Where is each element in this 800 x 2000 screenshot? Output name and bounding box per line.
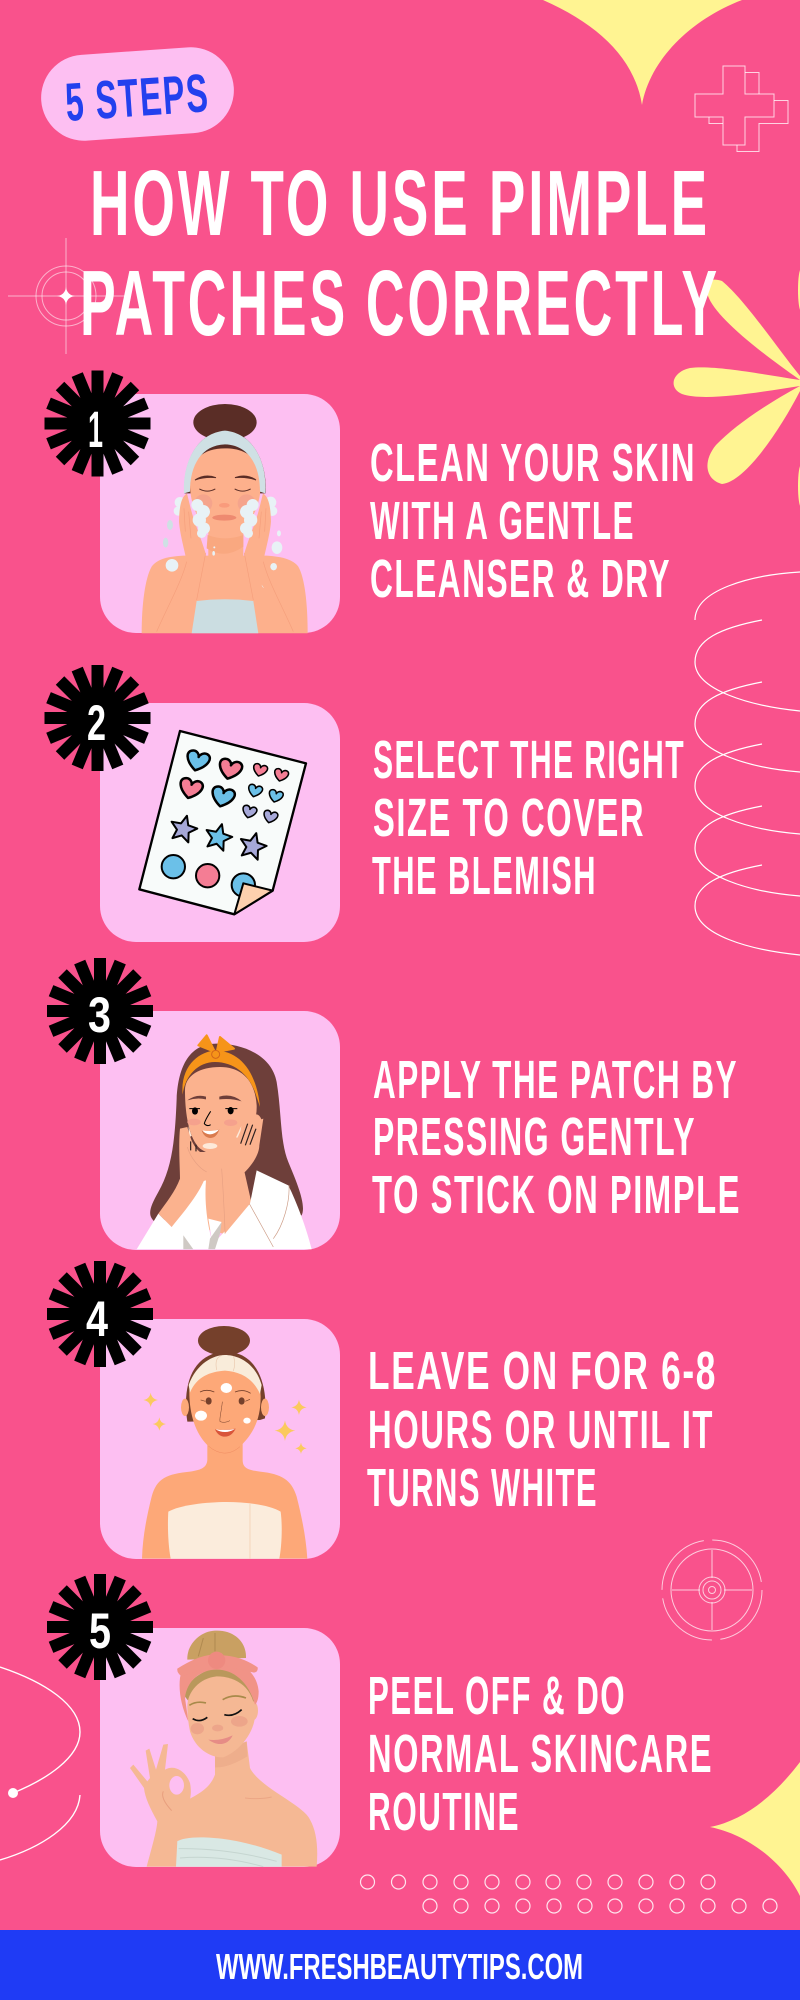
illustration: sticker sheet <box>139 731 306 914</box>
panel: step 2 <box>100 703 340 942</box>
number badge 2 <box>44 665 150 771</box>
text: step 2: THE BLEMISH <box>372 846 597 906</box>
decoration: dots <box>360 1875 777 1913</box>
illustration: woman with orange headband <box>137 1035 312 1249</box>
decoration: yellow flower <box>674 269 800 507</box>
title <box>80 151 720 355</box>
decoration: target circle right <box>662 1540 762 1640</box>
number badge 4: 4 <box>86 1291 108 1347</box>
footer website: WWW.FRESHBEAUTYTIPS.COM <box>216 1946 583 1987</box>
badge: 5 steps: 5 STEPS <box>63 63 211 133</box>
number badge 1: 1 <box>88 401 103 458</box>
panel: step 1 <box>100 394 340 633</box>
text: step 4: TURNS WHITE <box>367 1458 598 1518</box>
text: step 1 <box>370 433 696 609</box>
text: step 4 <box>367 1341 717 1518</box>
number badge 3: 3 <box>88 987 111 1043</box>
decoration: plus outlines <box>695 66 788 152</box>
panel: step 4 <box>100 1319 340 1559</box>
decoration: white spiral lines right <box>695 572 800 955</box>
number badge 4 <box>47 1261 153 1367</box>
panel: step 5 <box>100 1628 340 1867</box>
decoration: sparkle target top left <box>8 238 125 354</box>
number badge 3 <box>47 958 153 1064</box>
illustration: woman making OK sign <box>130 1631 317 1867</box>
number badge 2: 2 <box>87 695 106 751</box>
decoration: yellow star top <box>543 0 742 105</box>
text: step 5: ROUTINE <box>368 1782 520 1842</box>
number badge 5: 5 <box>89 1603 111 1659</box>
illustration: woman washing face <box>142 404 308 633</box>
text: step 2 <box>372 730 685 906</box>
number badge 1 <box>44 370 150 476</box>
text: step 3 <box>372 1050 741 1225</box>
panel: step 3 <box>100 1011 340 1250</box>
decoration: curved lines bottom left <box>0 1667 80 1860</box>
text: step 5 <box>368 1666 713 1842</box>
footer bar <box>0 1930 800 2000</box>
number badge 5 <box>47 1574 153 1680</box>
badge: 5 steps <box>38 44 237 144</box>
decoration: yellow star bottom right <box>710 1762 800 1896</box>
illustration: woman with white patches <box>142 1326 307 1559</box>
